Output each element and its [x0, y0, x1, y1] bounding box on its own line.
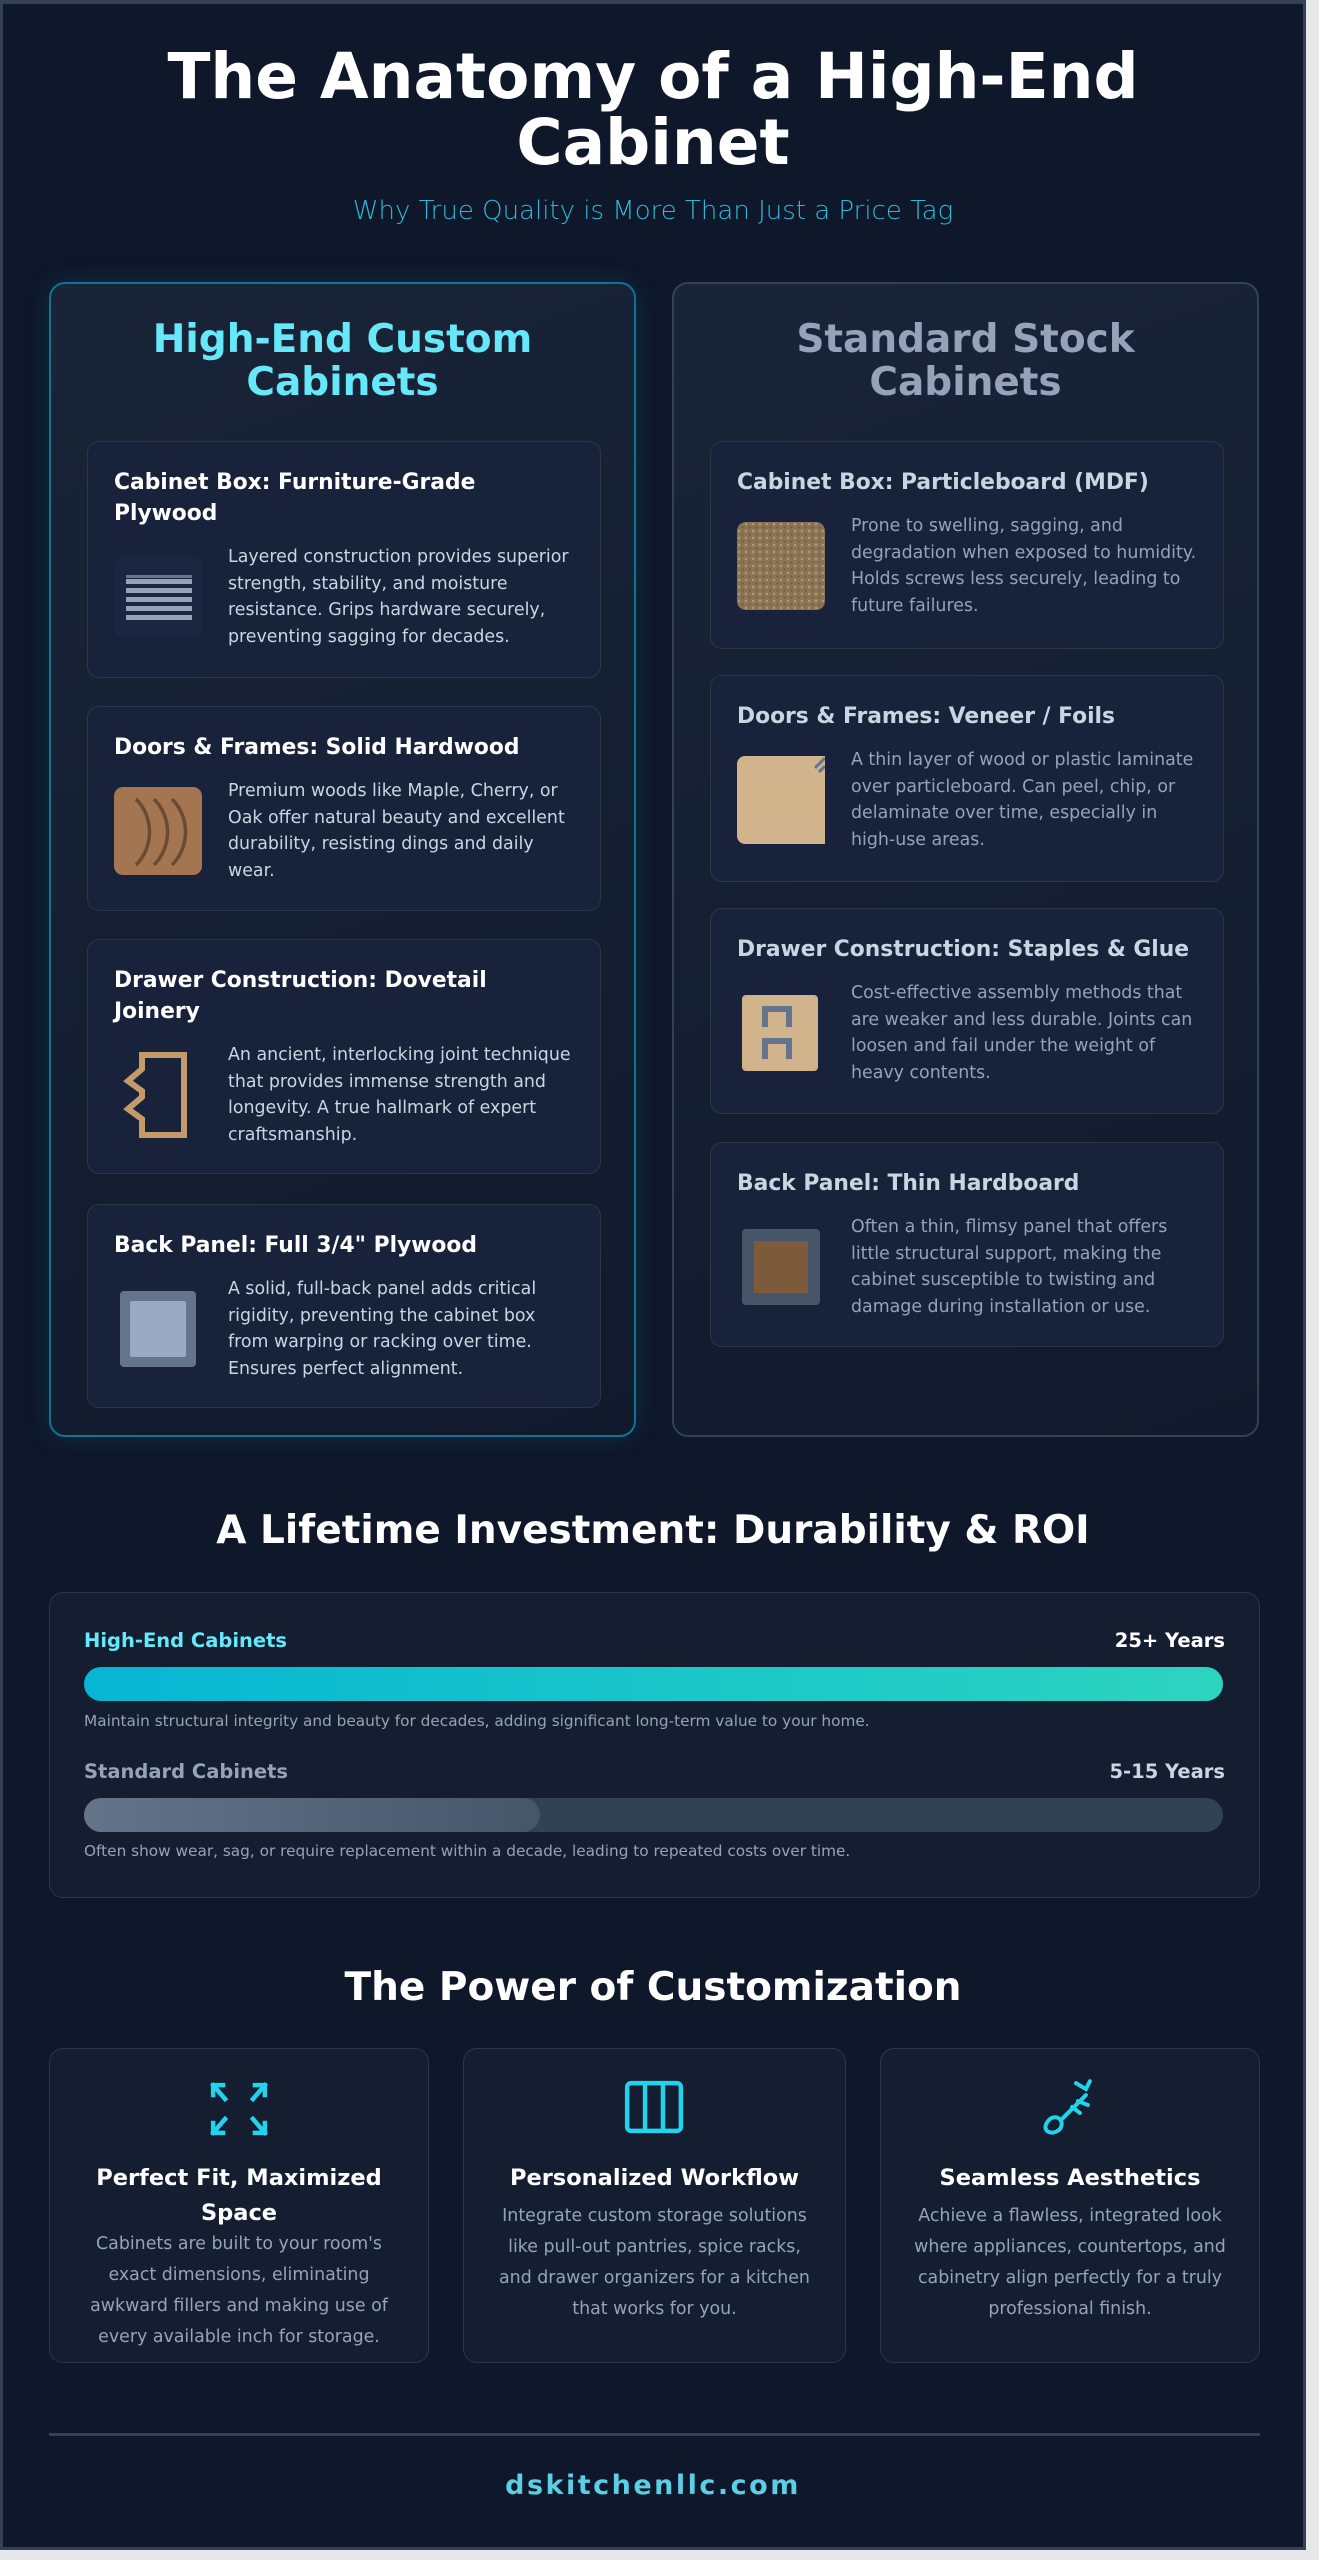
card: particleboard: Prone to swelling, sagging, and degradation when exposed to humidity. Holds screws less securely, leading to future failures.	[851, 516, 1196, 616]
card: hardboard back: Often a thin, flimsy panel that offers little structural support, making the cabinet susceptible to twisting and damage during installation or use.	[851, 1217, 1167, 1317]
heading: standard: Cabinets	[869, 360, 1062, 405]
card: workflow: Personalized Workflow	[510, 2165, 799, 2191]
panel: high-end custom cabinets	[49, 282, 636, 1437]
card: staples	[710, 908, 1224, 1114]
card: plywood box	[87, 441, 601, 678]
icon: veneer peel	[737, 756, 825, 844]
subtitle: Why True Quality is More Than Just a Price Tag	[353, 196, 953, 226]
card: plywood box: Layered construction provides superior strength, stability, and moisture resistance. Grips hardware securely, preventing sagging for decades.	[228, 547, 569, 647]
card: back panel plywood: A solid, full-back panel adds critical rigidity, preventing the cabinet box from warping or racking over time. Ensures perfect alignment.	[228, 1279, 536, 1379]
card: particleboard	[710, 441, 1224, 649]
card: dovetail: An ancient, interlocking joint technique that provides immense strength and longevity. A true hallmark of expert craftsmanship.	[228, 1045, 571, 1145]
icon: dovetail joint	[123, 1052, 187, 1138]
heading: high-end: High-End Custom	[153, 317, 532, 362]
heading: durability: A Lifetime Investment: Durability & ROI	[216, 1508, 1090, 1553]
card: aesthetics: Seamless Aesthetics	[940, 2165, 1200, 2191]
label: high-end: 25+ Years	[1115, 1629, 1225, 1652]
card: staples: Drawer Construction: Staples & Glue	[737, 937, 1189, 962]
title: Cabinet	[516, 106, 790, 179]
card: workflow: Integrate custom storage solutions like pull-out pantries, spice racks, and drawer organizers for a kitchen that works for you.	[499, 2206, 810, 2319]
panel: durability chart	[49, 1592, 1260, 1898]
card: staples: Cost-effective assembly methods that are weaker and less durable. Joints can loosen and fail under the weight of heavy contents.	[851, 983, 1192, 1083]
label: standard	[84, 1760, 1225, 1783]
card: perfect fit: Perfect Fit, Maximized Space	[96, 2165, 382, 2226]
panel: standard stock cabinets	[672, 282, 1259, 1437]
desc: high-end: Maintain structural integrity and beauty for decades, adding significant long-term value to your home.	[84, 1712, 870, 1730]
heading: customization: The Power of Customization	[344, 1965, 962, 2010]
icon: magic wand	[1044, 2079, 1092, 2135]
card: veneer	[710, 675, 1224, 882]
desc: standard: Often show wear, sag, or require replacement within a decade, leading to repeated costs over time.	[84, 1842, 850, 1860]
heading: standard: Standard Stock	[796, 317, 1135, 362]
icon: staples	[742, 995, 818, 1071]
icon: thin back panel	[742, 1229, 820, 1305]
title: The Anatomy of a High-End	[167, 40, 1139, 113]
heading: high-end	[153, 317, 532, 405]
icon: plywood layers	[126, 575, 192, 620]
card: perfect fit: Cabinets are built to your room's exact dimensions, eliminating awkward fillers and making use of every available inch for storage.	[90, 2234, 388, 2347]
card: hardboard back: Back Panel: Thin Hardboard	[737, 1171, 1079, 1196]
icon: solid back panel	[120, 1291, 196, 1367]
card: workflow	[463, 2048, 846, 2363]
footer: website: dskitchenllc.com	[505, 2470, 801, 2501]
icon: wood grain	[114, 787, 202, 875]
card: aesthetics	[880, 2048, 1260, 2363]
label: high-end: High-End Cabinets	[84, 1629, 287, 1652]
bar: high-end	[84, 1667, 1223, 1701]
card: aesthetics: Achieve a flawless, integrated look where appliances, countertops, and cabinetry align perfectly for a truly professional finish.	[914, 2206, 1226, 2319]
card: solid hardwood	[87, 706, 601, 911]
icon: particleboard	[737, 522, 825, 610]
card: hardboard back	[710, 1142, 1224, 1347]
card: plywood box: Cabinet Box: Furniture-Grade Plywood	[114, 470, 475, 526]
label: high-end	[84, 1629, 1225, 1652]
label: standard: Standard Cabinets	[84, 1760, 288, 1783]
card: perfect fit	[49, 2048, 429, 2363]
title	[167, 40, 1139, 179]
card: dovetail: Drawer Construction: Dovetail Joinery	[114, 968, 487, 1024]
icon: cabinet columns	[624, 2080, 684, 2134]
card: solid hardwood: Premium woods like Maple, Cherry, or Oak offer natural beauty and excellent durability, resisting dings and daily wear.	[228, 781, 565, 881]
card: particleboard: Cabinet Box: Particleboard (MDF)	[737, 470, 1149, 495]
label: standard: 5-15 Years	[1109, 1760, 1225, 1783]
card: veneer: A thin layer of wood or plastic laminate over particleboard. Can peel, chip, or delaminate over time, especially in high-use areas.	[851, 750, 1193, 850]
card: solid hardwood: Doors & Frames: Solid Hardwood	[114, 735, 519, 760]
card: back panel plywood: Back Panel: Full 3/4" Plywood	[114, 1233, 477, 1258]
card: back panel plywood	[87, 1204, 601, 1408]
bar: standard	[84, 1798, 1223, 1832]
heading: standard	[796, 317, 1136, 405]
icon: expand arrows	[210, 2082, 268, 2136]
card: veneer: Doors & Frames: Veneer / Foils	[737, 704, 1115, 729]
card: dovetail	[87, 939, 601, 1174]
heading: high-end: Cabinets	[246, 360, 439, 405]
